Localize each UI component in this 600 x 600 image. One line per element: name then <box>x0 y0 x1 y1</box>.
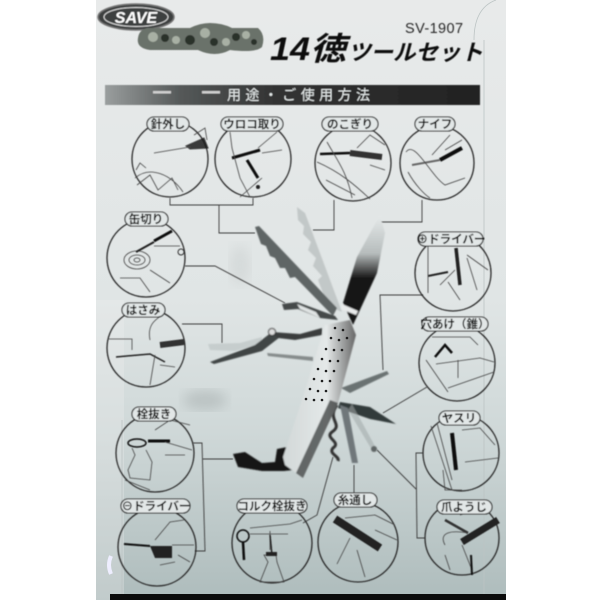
panel: 缶切り <box>107 219 185 297</box>
label: ナイフ: ナイフ <box>418 118 452 131</box>
file blade <box>338 402 396 424</box>
scissors <box>208 328 322 364</box>
camouflage badge <box>138 23 263 54</box>
panel: コルク栓抜き <box>232 503 312 583</box>
label: 糸通し <box>334 493 377 507</box>
panel: 糸通し <box>318 502 398 582</box>
label: ウロコ取り: ウロコ取り <box>223 118 281 131</box>
card background <box>96 0 506 600</box>
header <box>98 4 483 105</box>
panel: マイナスドライバー <box>118 508 196 586</box>
label: プラスドライバー: ⊕ドライバー <box>417 233 485 246</box>
label: 栓抜き <box>132 407 176 421</box>
label: コルク栓抜き: コルク栓抜き <box>238 499 306 513</box>
can opener <box>282 302 338 320</box>
label: 針外し: 針外し <box>151 117 185 131</box>
label: ヤスリ: ヤスリ <box>442 412 476 425</box>
panel: ヤスリ <box>423 415 499 491</box>
label: はさみ: はさみ <box>126 304 161 317</box>
panel: のこぎり <box>315 125 391 201</box>
logo: SAVE <box>98 4 174 30</box>
bottle opener <box>233 447 293 471</box>
connector lines <box>170 198 427 551</box>
section heading bar <box>105 85 480 105</box>
panel: ウロコ取り <box>215 121 291 197</box>
label: 缶切り: 缶切り <box>129 212 163 226</box>
title <box>270 31 483 67</box>
panel: 穴あけ <box>419 325 495 401</box>
small blade right <box>341 371 389 393</box>
panel: 爪ようじ <box>425 501 499 575</box>
bottom black bar <box>110 594 506 600</box>
label: はさみ <box>122 303 165 317</box>
nail file <box>340 405 358 463</box>
panel: 針外し <box>132 121 208 197</box>
model number: SV-1907 <box>405 21 463 37</box>
panel: 栓抜き <box>116 414 194 492</box>
label: のこぎり: のこぎり <box>327 117 373 131</box>
label: 穴あけ: 穴あけ（錐） <box>420 317 490 331</box>
section heading bar: 用途・ご使用方法 <box>227 87 370 103</box>
handle dots <box>305 327 348 401</box>
title: 14徳 <box>270 31 352 67</box>
scaler blade <box>297 207 342 312</box>
main knife blade <box>343 215 385 325</box>
usage illustrations <box>107 117 499 586</box>
saw blade <box>255 226 337 316</box>
panel: はさみ <box>107 309 185 387</box>
label: 栓抜き: 栓抜き <box>137 407 171 421</box>
metal hook <box>109 556 111 574</box>
multi-tool knife <box>208 207 396 478</box>
label: マイナスドライバー: ⊖ドライバー <box>122 500 190 513</box>
corkscrew <box>330 405 338 461</box>
logo: SAVE: SAVE <box>115 10 159 27</box>
label: 爪ようじ: 爪ようじ <box>441 501 487 514</box>
handle <box>283 320 356 478</box>
label: 糸通し: 糸通し <box>338 493 372 507</box>
title: ツールセット <box>348 40 483 65</box>
panel: ナイフ <box>400 126 474 200</box>
label: 缶切り <box>125 212 168 226</box>
panel: プラスドライバー <box>415 235 491 311</box>
